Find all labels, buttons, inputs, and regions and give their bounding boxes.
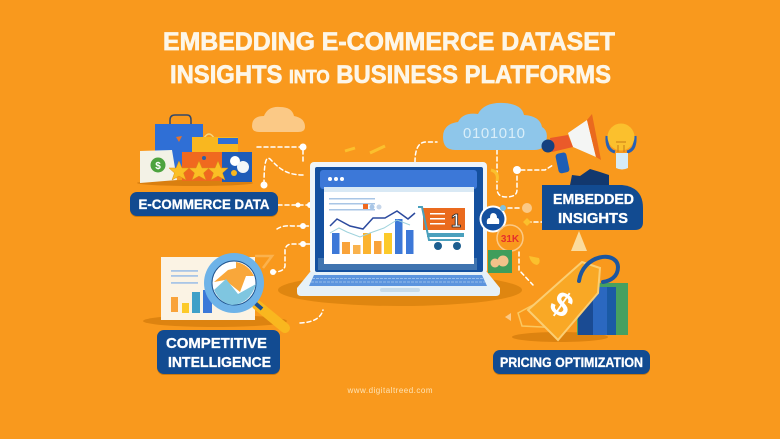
label: competitive intelligence [157,330,280,375]
label: embedded insights: EMBEDDED [553,192,634,208]
icon: small yellow ornament [529,256,540,265]
laptop [278,162,522,306]
dashed connectors [257,142,553,323]
icon: shopping bags and stars [137,115,253,186]
label: e-commerce data [130,192,278,217]
icon: green bag [488,250,512,273]
icon: megaphone [542,114,601,174]
label: pricing optimization [493,350,650,375]
icon: binary cloud: 0101010 [463,125,525,142]
label: pricing optimization: PRICING OPTIMIZATION [500,355,643,370]
title [163,28,615,89]
label: competitive intelligence: INTELLIGENCE [168,355,271,371]
icon: binary cloud [443,103,547,150]
icon: user badge [480,205,506,232]
dashboard chart [329,198,415,254]
icon: shopping cart: 1 [451,211,461,231]
icon: peach circle [522,203,532,213]
small triangle marker [571,231,587,251]
title: INSIGHTS INTO BUSINESS PLATFORMS [170,61,611,89]
label: e-commerce data: E-COMMERCE DATA [138,197,270,212]
icon: diamond marker [523,218,531,226]
icon: peach arrow [255,256,272,268]
label: competitive intelligence: COMPETITIVE [166,336,267,352]
badge: 31K [497,225,523,251]
icon: peach cloud [252,107,305,132]
label: embedded insights: INSIGHTS [558,211,628,227]
title: EMBEDDING E-COMMERCE DATASET [163,28,615,56]
decorative small arrows [345,146,497,181]
badge: 31K: 31K [501,234,520,245]
icon: magnifier over report [143,253,287,328]
website footer: www.digitaltreed.com [346,386,433,395]
icon: light bulb [607,124,635,170]
icon: shopping cart [418,207,465,250]
icon: shopping bags and stars: $ [155,161,161,172]
icon: price tag and books [505,257,628,342]
icon: price tag and books: $ [543,284,580,326]
label: embedded insights [542,169,643,230]
